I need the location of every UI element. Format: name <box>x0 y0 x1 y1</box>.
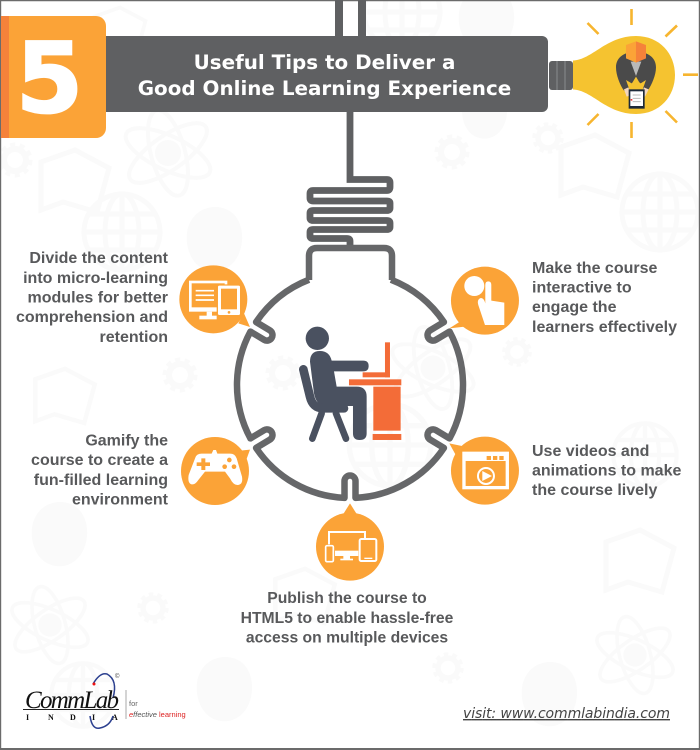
tip: gamify: fun-filled learning <box>34 472 168 489</box>
CommLab logo: D <box>70 713 76 722</box>
tip: videos: animations to make <box>532 462 681 480</box>
icon bubble: game controller <box>181 437 250 505</box>
CommLab logo: CommLab <box>25 687 119 714</box>
stem and coil of main bulb <box>310 112 390 248</box>
title: Good Online Learning Experience <box>138 77 511 100</box>
main bulb outline <box>237 248 463 498</box>
tip: HTML5: Publish the course to <box>267 590 427 607</box>
tip: videos: Use videos and <box>532 443 649 460</box>
website link: visit: www.commlabindia.com <box>463 706 670 722</box>
light bulb with person icon, top right <box>549 9 698 138</box>
icon bubble: video window <box>449 437 519 505</box>
icon bubble: touch hand <box>449 267 519 335</box>
number badge: 5 <box>16 22 83 135</box>
icon bubble: multiple devices <box>316 503 384 581</box>
CommLab logo: effective learning <box>129 710 186 719</box>
tip: interactive: interactive to <box>532 280 632 296</box>
hanging cords above title bar <box>335 0 366 38</box>
tip: micro-learning: retention <box>100 329 168 346</box>
title: Useful Tips to Deliver a <box>194 51 455 74</box>
CommLab logo: I <box>92 713 95 722</box>
title bar <box>100 36 548 112</box>
person at desk icon <box>303 327 401 440</box>
tip: videos: the course lively <box>532 482 657 499</box>
CommLab logo: © <box>115 673 120 680</box>
icon bubble: monitor and tablet <box>179 265 250 333</box>
CommLab logo: I <box>26 713 29 722</box>
tip: micro-learning: Divide the content <box>29 250 169 267</box>
tip: gamify: environment <box>72 492 169 508</box>
CommLab logo: for <box>129 699 138 708</box>
number badge <box>1 16 106 138</box>
tip: interactive: engage the <box>532 299 617 316</box>
CommLab logo <box>23 673 186 728</box>
tip: micro-learning: modules for better <box>28 290 168 306</box>
tip: HTML5: HTML5 to enable hassle-free <box>241 610 454 627</box>
tip: gamify: course to create a <box>31 452 168 469</box>
tip: gamify: Gamify the <box>85 432 168 450</box>
tip: interactive: Make the course <box>532 260 657 277</box>
tip: HTML5: access on multiple devices <box>246 630 448 646</box>
CommLab logo: N <box>48 713 54 722</box>
tip: micro-learning: into micro-learning <box>23 270 168 287</box>
tip: interactive: learners effectively <box>532 319 677 336</box>
CommLab logo: A <box>112 713 118 722</box>
tip: micro-learning: comprehension and <box>16 309 168 326</box>
